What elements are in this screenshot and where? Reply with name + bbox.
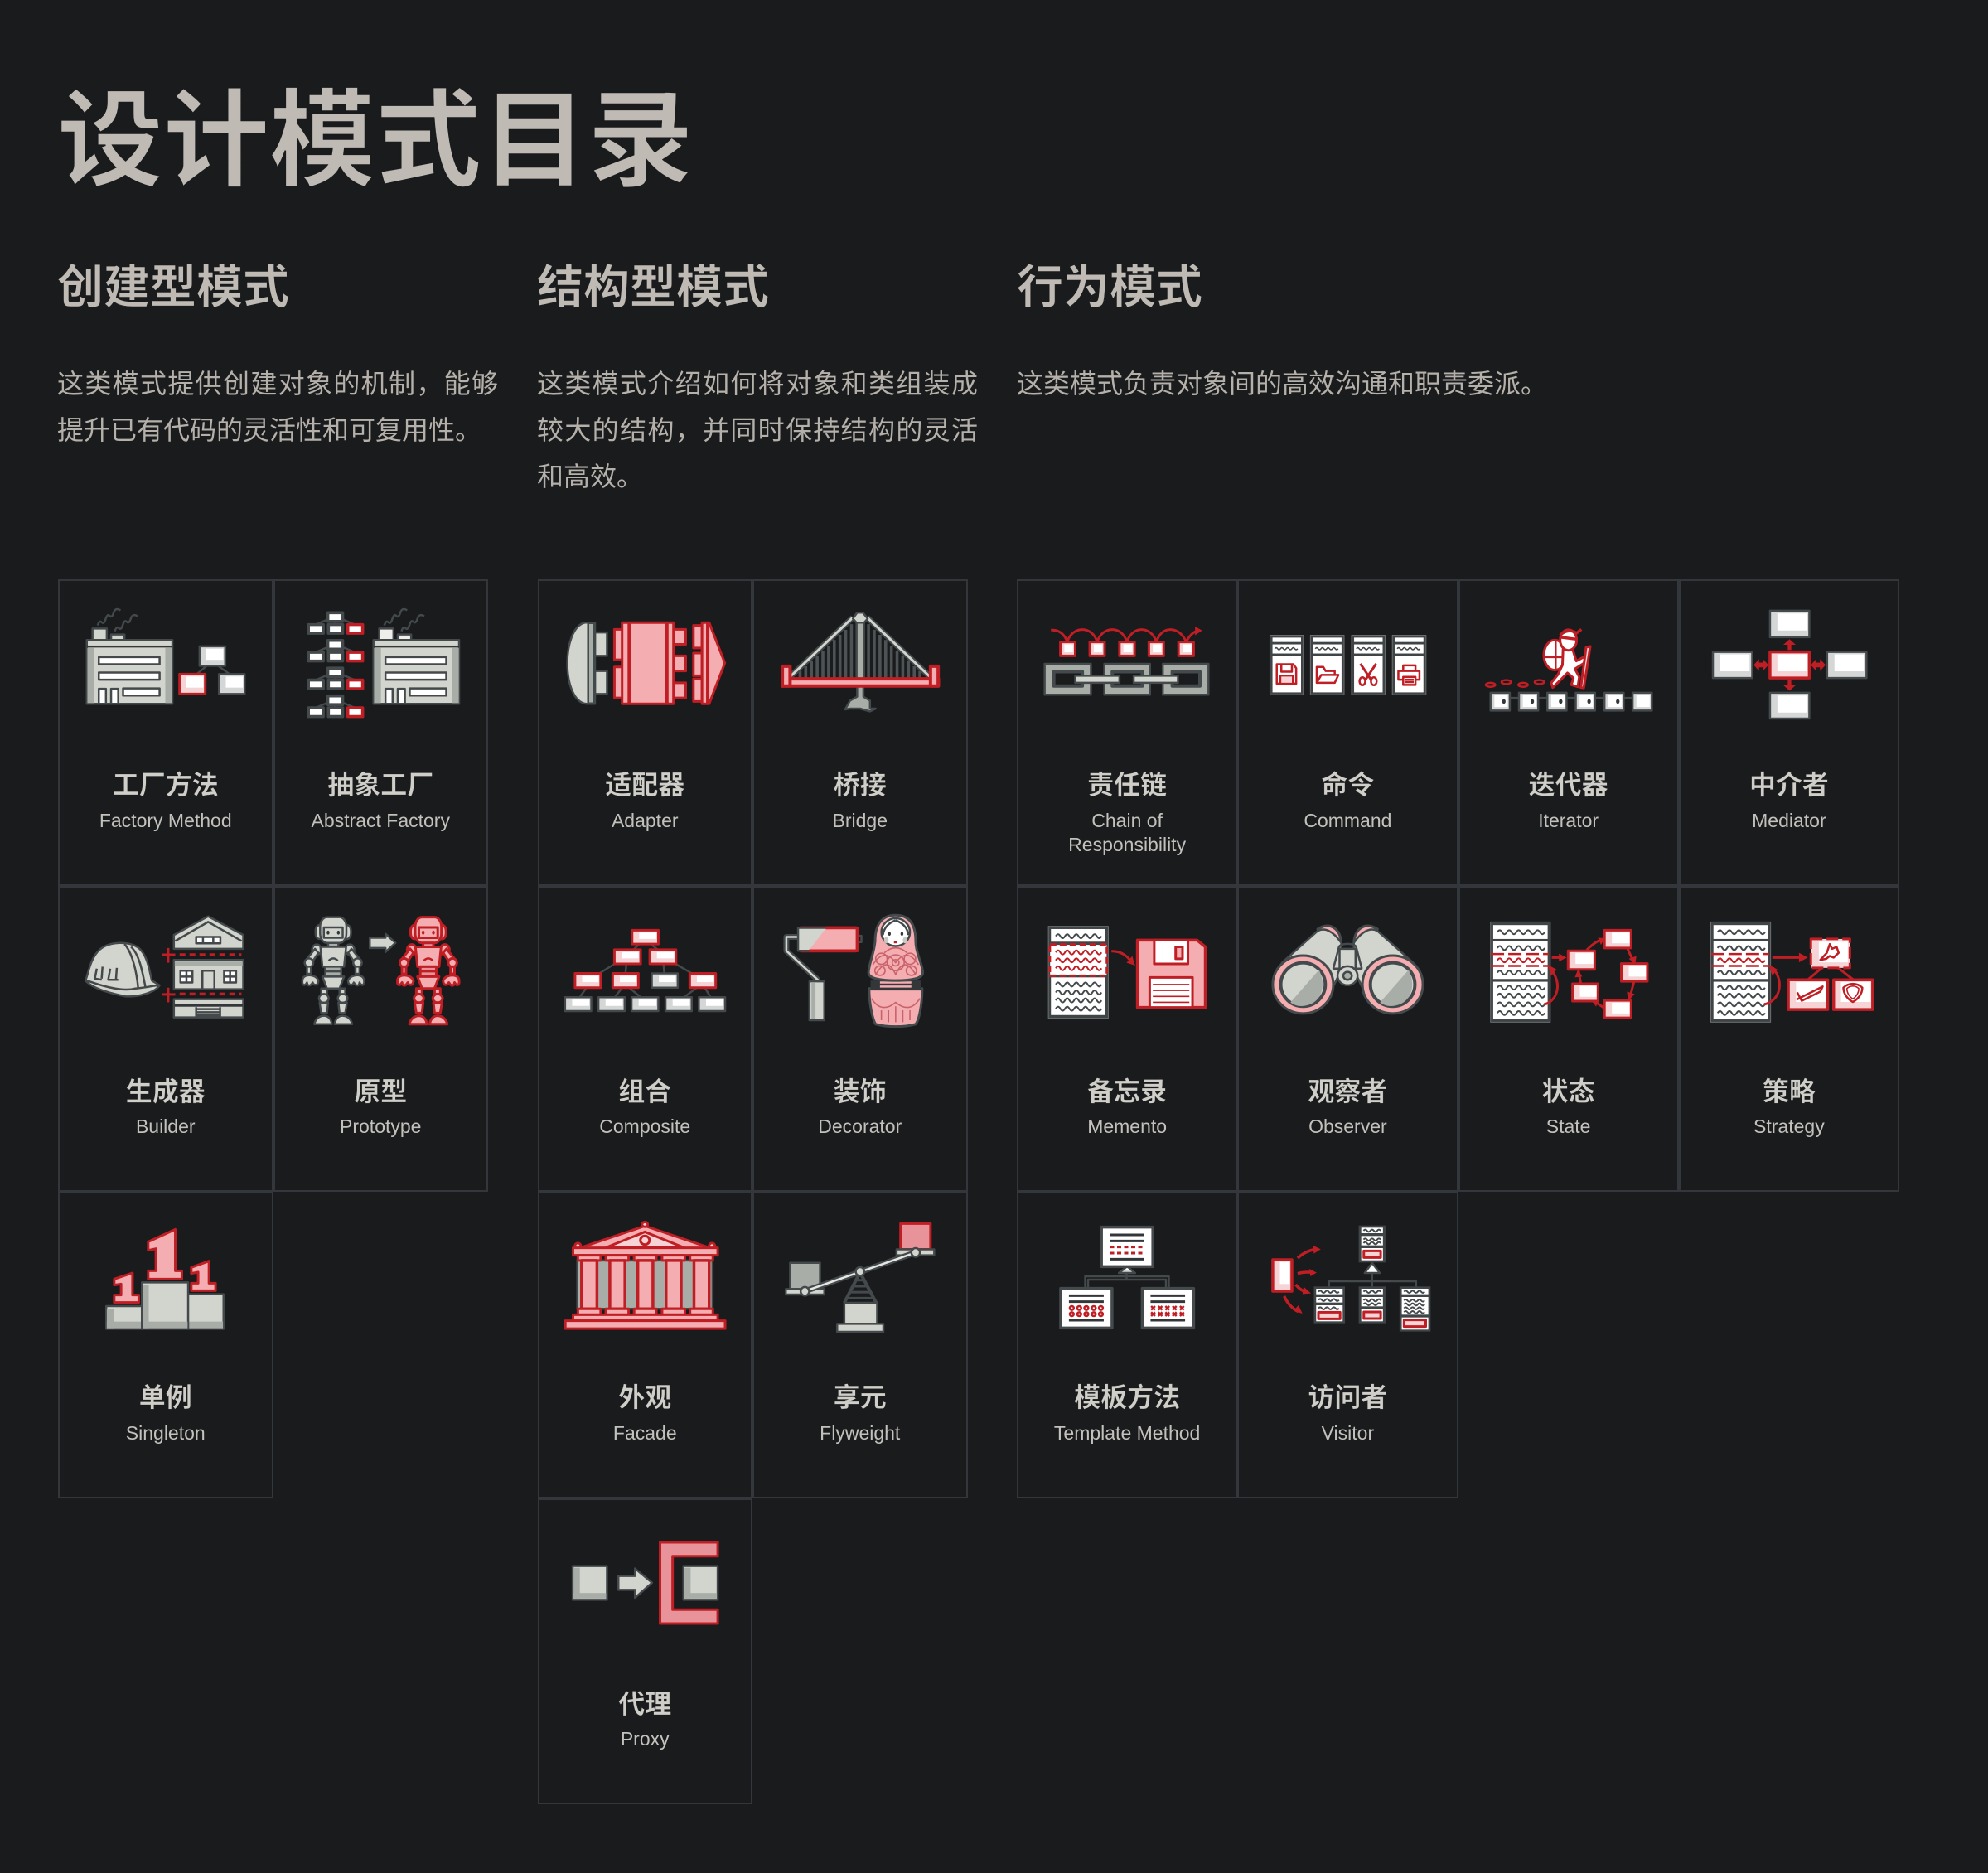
name zh: 备忘录 xyxy=(1087,1076,1167,1106)
name zh: 策略 xyxy=(1763,1076,1816,1106)
panel: visitor xyxy=(1237,1192,1458,1498)
name zh: 模板方法 xyxy=(1074,1382,1180,1412)
icon: temple facade xyxy=(564,1221,727,1330)
panel: adapter xyxy=(537,579,752,885)
description: creational: 这类模式提供创建对象的机制，能够 xyxy=(57,369,498,399)
panel: proxy xyxy=(537,1498,752,1804)
name zh: 迭代器 xyxy=(1529,770,1608,800)
icon: chain xyxy=(1043,627,1210,696)
name zh: 中介者 xyxy=(1749,770,1829,800)
name en: Visitor xyxy=(1322,1422,1374,1444)
description: structural: 这类模式介绍如何将对象和类组装成 xyxy=(537,369,978,399)
name zh: 生成器 xyxy=(126,1076,206,1106)
icon: document and strategy tree xyxy=(1710,922,1874,1023)
name zh: 观察者 xyxy=(1308,1076,1387,1106)
description: creational: 提升已有代码的灵活性和可复用性。 xyxy=(57,415,481,445)
icon: podium with ones xyxy=(105,1228,225,1330)
name en: Chain of xyxy=(1091,809,1163,830)
icon: mediator hub xyxy=(1712,610,1868,719)
name en: Decorator xyxy=(818,1116,902,1137)
name zh: 代理 xyxy=(618,1689,671,1719)
name zh: 状态 xyxy=(1542,1076,1595,1106)
description: structural: 和高效。 xyxy=(537,462,643,491)
name zh: 组合 xyxy=(618,1076,671,1106)
name en: Facade xyxy=(613,1422,677,1444)
name zh: 单例 xyxy=(139,1382,192,1412)
heading: creational: 创建型模式 xyxy=(57,260,289,313)
name zh: 访问者 xyxy=(1308,1382,1387,1412)
panel: memento xyxy=(1017,885,1237,1192)
icon: paint roller and matryoshka xyxy=(784,913,924,1028)
name zh: 抽象工厂 xyxy=(327,770,433,800)
description: creational xyxy=(57,369,498,445)
name zh: 责任链 xyxy=(1087,770,1167,800)
name en: Iterator xyxy=(1538,809,1599,830)
name en: Factory Method xyxy=(99,809,232,830)
icon: template hierarchy xyxy=(1059,1225,1195,1329)
icon: proxy xyxy=(572,1541,719,1624)
name en: Flyweight xyxy=(820,1422,900,1444)
heading: structural: 结构型模式 xyxy=(537,260,769,313)
panel: template method xyxy=(1017,1192,1237,1498)
panel: facade xyxy=(537,1192,752,1498)
name zh: 享元 xyxy=(834,1382,887,1412)
panel: iterator xyxy=(1458,579,1679,885)
name zh: 工厂方法 xyxy=(113,770,219,800)
panel: command xyxy=(1237,579,1458,885)
icon: visitor and documents xyxy=(1271,1225,1430,1332)
name en: Memento xyxy=(1087,1116,1167,1137)
name en: State xyxy=(1546,1116,1590,1137)
name en: Template Method xyxy=(1054,1422,1200,1444)
name en: Responsibility xyxy=(1068,834,1186,855)
name en: Singleton xyxy=(126,1422,206,1444)
icon: helmet and house xyxy=(85,915,244,1019)
icon: hiker on linked list xyxy=(1485,628,1652,712)
name en: Command xyxy=(1304,809,1391,830)
icon: suspension bridge xyxy=(781,612,940,713)
name en: Mediator xyxy=(1752,809,1826,830)
name en xyxy=(1068,809,1186,855)
name en: Prototype xyxy=(340,1116,421,1137)
name zh: 命令 xyxy=(1321,770,1374,800)
panel: strategy xyxy=(1679,885,1899,1192)
panel: flyweight xyxy=(752,1192,968,1498)
icon: binoculars xyxy=(1271,925,1424,1014)
panel: composite xyxy=(537,885,752,1192)
icon: robots and arrow xyxy=(302,916,461,1026)
name zh: 桥接 xyxy=(834,770,887,800)
panel: chain of responsibility xyxy=(1017,579,1237,885)
panel: observer xyxy=(1237,885,1458,1192)
icon: document and state cycle xyxy=(1490,922,1649,1023)
description: behavioral: 这类模式负责对象间的高效沟通和职责委派。 xyxy=(1017,369,1547,399)
panel: builder xyxy=(58,885,273,1192)
name en: Adapter xyxy=(612,809,679,830)
name en: Abstract Factory xyxy=(312,809,450,830)
name zh: 适配器 xyxy=(605,770,684,800)
panel: factory method xyxy=(58,579,273,885)
panel: state xyxy=(1458,885,1679,1192)
icon: document and floppy xyxy=(1047,926,1207,1019)
icon: seesaw xyxy=(785,1222,935,1333)
name en: Bridge xyxy=(832,809,888,830)
name en: Builder xyxy=(136,1116,196,1137)
title: 设计模式目录 xyxy=(57,82,694,201)
icon: factories and trees xyxy=(307,608,461,718)
name zh: 外观 xyxy=(618,1382,671,1412)
panel: abstract factory xyxy=(273,579,488,885)
icon: factory and tree xyxy=(86,608,245,704)
name en: Observer xyxy=(1308,1116,1387,1137)
name zh: 原型 xyxy=(354,1076,407,1106)
description: structural xyxy=(537,369,978,491)
panel: bridge xyxy=(752,579,968,885)
heading: behavioral: 行为模式 xyxy=(1017,260,1202,313)
panel: prototype xyxy=(273,885,488,1192)
panel: mediator xyxy=(1679,579,1899,885)
panel: decorator xyxy=(752,885,968,1192)
description: structural: 较大的结构，并同时保持结构的灵活 xyxy=(537,415,978,445)
name en: Composite xyxy=(599,1116,690,1137)
panel: singleton xyxy=(58,1192,273,1498)
icon: adapter plugs xyxy=(566,622,726,705)
name en: Proxy xyxy=(621,1728,670,1750)
icon: command cards xyxy=(1270,635,1427,695)
name zh: 装饰 xyxy=(834,1076,887,1106)
name en: Strategy xyxy=(1753,1116,1825,1137)
icon: tree xyxy=(564,928,726,1013)
